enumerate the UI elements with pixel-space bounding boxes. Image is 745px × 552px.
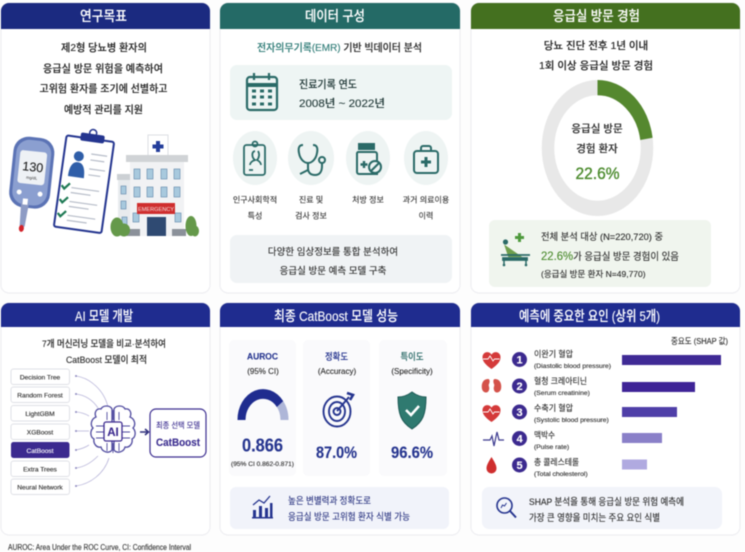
metric card: specificity: 특이도 [400,352,424,363]
text: research goal statement [40,41,168,116]
callout: SHAP summary [482,487,722,529]
icon: magnifier [497,498,516,518]
metric card: accuracy: (Accuracy) [318,367,356,376]
heading: CatBoost performance [220,303,460,327]
factor 4 [483,430,662,451]
panel: record years [230,65,452,120]
metric card: AUROC: 0.866 [242,436,283,456]
metric card: specificity [379,340,447,476]
icon: glucose meter: 130 [22,159,44,175]
list: candidate models: XGBoost [27,430,53,436]
text: record years: 2008년 ~ 2022년 [299,97,385,110]
icon: AI brain: AI [107,427,119,439]
factor 5: (Total cholesterol) [534,471,588,478]
arrows: models to AI [75,375,109,487]
text: model comparison [42,338,166,366]
factor 4: 4 [516,434,523,446]
text: performance summary: 응급실 방문 고위험 환자 식별 가능 [288,511,410,523]
text: ED visit definition: 당뇨 진단 전후 1년 이내 [544,40,648,52]
heading: AI model development: AI 모델 개발 [75,308,133,324]
factor 5: 총 콜레스테롤 [534,457,579,467]
heading: research goal [1,3,210,29]
text: performance summary: 높은 변별력과 정확도로 [288,495,371,507]
callout: ED visit count [489,220,711,287]
chart: donut 22.6%: 응급실 방문 [571,122,623,135]
heading: research goal: 연구목표 [80,8,127,24]
icon: hospital building: EMERGENCY [138,207,174,213]
icon: glucose meter: mg/dL [26,175,38,181]
metric card: specificity: 96.6% [391,443,433,462]
factor 1: 1 [516,354,523,366]
icon: shield [398,392,426,429]
text: data categories: 이력 [419,210,433,220]
panel: data composition [220,3,460,293]
factor 3 [482,402,677,424]
text: ED visit count: 전체 분석 대상 (N=220,720) 중 [541,232,663,243]
list: candidate models [11,369,70,494]
icon: calendar [247,73,277,110]
callout: performance summary [230,487,449,529]
text: data categories: 진료 및 [299,194,323,204]
icon: patient clipboard [54,126,115,233]
text: research goal statement: 제2형 당뇨병 환자의 [61,41,147,54]
heading: top 5 factors: 예측에 중요한 요인 (상위 5개) [519,308,660,324]
factor 1: 이완기 혈압 [534,348,573,359]
text: performance summary [288,495,410,523]
icon: patient on bed [501,233,530,266]
text: ED visit definition: 1회 이상 응급실 방문 경험 [539,59,653,72]
chart: donut 22.6%: 경험 환자 [576,142,618,155]
icon: glucose meter [5,135,56,234]
metric card: AUROC [229,340,296,476]
text: SHAP summary [529,496,684,524]
factor 1 [482,348,721,370]
text: data categories: 인구사회학적 [233,194,277,204]
chart: AUROC gauge [241,394,284,420]
text: research goal statement: 고위험 환자를 조기에 선별하고 [40,82,168,95]
callout: final model: CatBoost [156,437,200,449]
icon: demographics [233,131,277,185]
metric card: AUROC: (95% CI) [247,367,279,376]
metric card: accuracy [303,340,370,476]
factor 2: (Serum creatinine) [534,390,590,397]
text: SHAP summary: SHAP 분석을 통해 응급실 방문 위험 예측에 [529,496,684,508]
factor 1: (Diastolic blood pressure) [534,363,611,370]
heading: AI model development [1,303,210,327]
heading: CatBoost performance: 최종 CatBoost 모델 성능 [274,308,398,324]
heading: data composition [220,3,460,29]
text: SHAP summary: 가장 큰 영향을 미치는 주요 요인 식별 [529,512,660,524]
text: record years [299,78,385,110]
panel: top 5 factors [471,303,740,535]
factor 5: 5 [516,460,523,472]
text: SHAP axis label: 중요도 (SHAP 값) [671,336,728,346]
text: ED visit count: (응급실 방문 환자 N=49,770) [541,269,646,279]
text: model comparison: CatBoost 모델이 최적 [66,354,147,366]
panel: ED visit experience [471,3,740,293]
factor 4: (Pulse rate) [534,444,569,451]
text: model comparison: 7개 머신러닝 모델을 비교·분석하여 [42,338,166,350]
list: candidate models: Random Forest [17,392,63,400]
icon: AI brain [91,406,135,453]
callout: final model [150,409,206,457]
metric card: specificity: (Specificity) [391,367,433,376]
text: record years: 진료기록 연도 [299,78,357,91]
icon: hospital building [110,135,199,236]
icon: medication [346,131,390,185]
icon: target [324,393,353,426]
chart: donut 22.6% [548,88,647,208]
text: research goal statement: 예방적 관리를 지원 [64,103,143,116]
list: candidate models: CatBoost [26,448,54,455]
icon: stethoscope [288,131,334,185]
text: ED visit count: 22.6%가 응급실 방문 경험이 있음 [541,249,679,263]
arrow: to final model [140,429,148,435]
list: candidate models: Decision Tree [20,374,60,382]
factor 2: 2 [516,381,523,393]
callout: data integration [230,235,452,283]
text: research goal statement: 응급실 방문 위험을 예측하여 [43,62,163,75]
metric card: AUROC: AUROC [247,352,278,362]
factor 3: 수축기 혈압 [534,402,573,413]
callout: data integration: 다양한 임상정보를 통합 분석하여 [268,246,398,258]
factor 5 [486,457,647,478]
list: candidate models: LightGBM [25,411,55,418]
heading: ED visit experience: 응급실 방문 경험 [553,8,640,24]
text: data categories: 특성 [248,212,262,220]
heading: data composition: 데이터 구성 [305,8,365,24]
factor 2 [482,375,695,397]
list: candidate models: Extra Trees [23,466,58,474]
factor 2: 혈청 크레아티닌 [534,375,587,386]
metric card: AUROC: (95% CI 0.862-0.871) [231,461,294,468]
chart: donut 22.6%: 22.6% [576,164,620,183]
heading: ED visit experience [471,3,740,29]
metric card: accuracy: 87.0% [316,443,357,462]
text: data categories [233,194,449,220]
text: data categories: 처방 정보 [352,194,384,204]
text: ED visit count [541,232,679,279]
list: candidate models: Neural Network [17,484,63,492]
footnote: AUROC: Area Under the ROC Curve, CI: Confidence Interval [8,543,191,552]
factor 3: 3 [516,407,523,419]
text: data categories: 검사 정보 [295,210,327,220]
panel: research goal [1,3,210,293]
panel: CatBoost performance [220,303,460,535]
text: data categories: 과거 의료이용 [403,194,449,204]
callout: data integration: 응급실 방문 예측 모델 구축 [280,265,387,277]
heading: top 5 factors [471,303,740,327]
panel: AI model development [1,303,210,535]
factor 4: 맥박수 [534,430,555,440]
text: ED visit definition [539,40,653,72]
icon: growth chart [252,496,273,518]
factor 3: (Systolic blood pressure) [534,417,609,424]
icon: medical history [404,131,448,185]
metric card: accuracy: 정확도 [325,351,348,363]
callout: final model: 최종 선택 모델 [156,420,200,430]
text: data subtitle: 전자의무기록(EMR) 기반 빅데이터 분석 [257,42,422,54]
